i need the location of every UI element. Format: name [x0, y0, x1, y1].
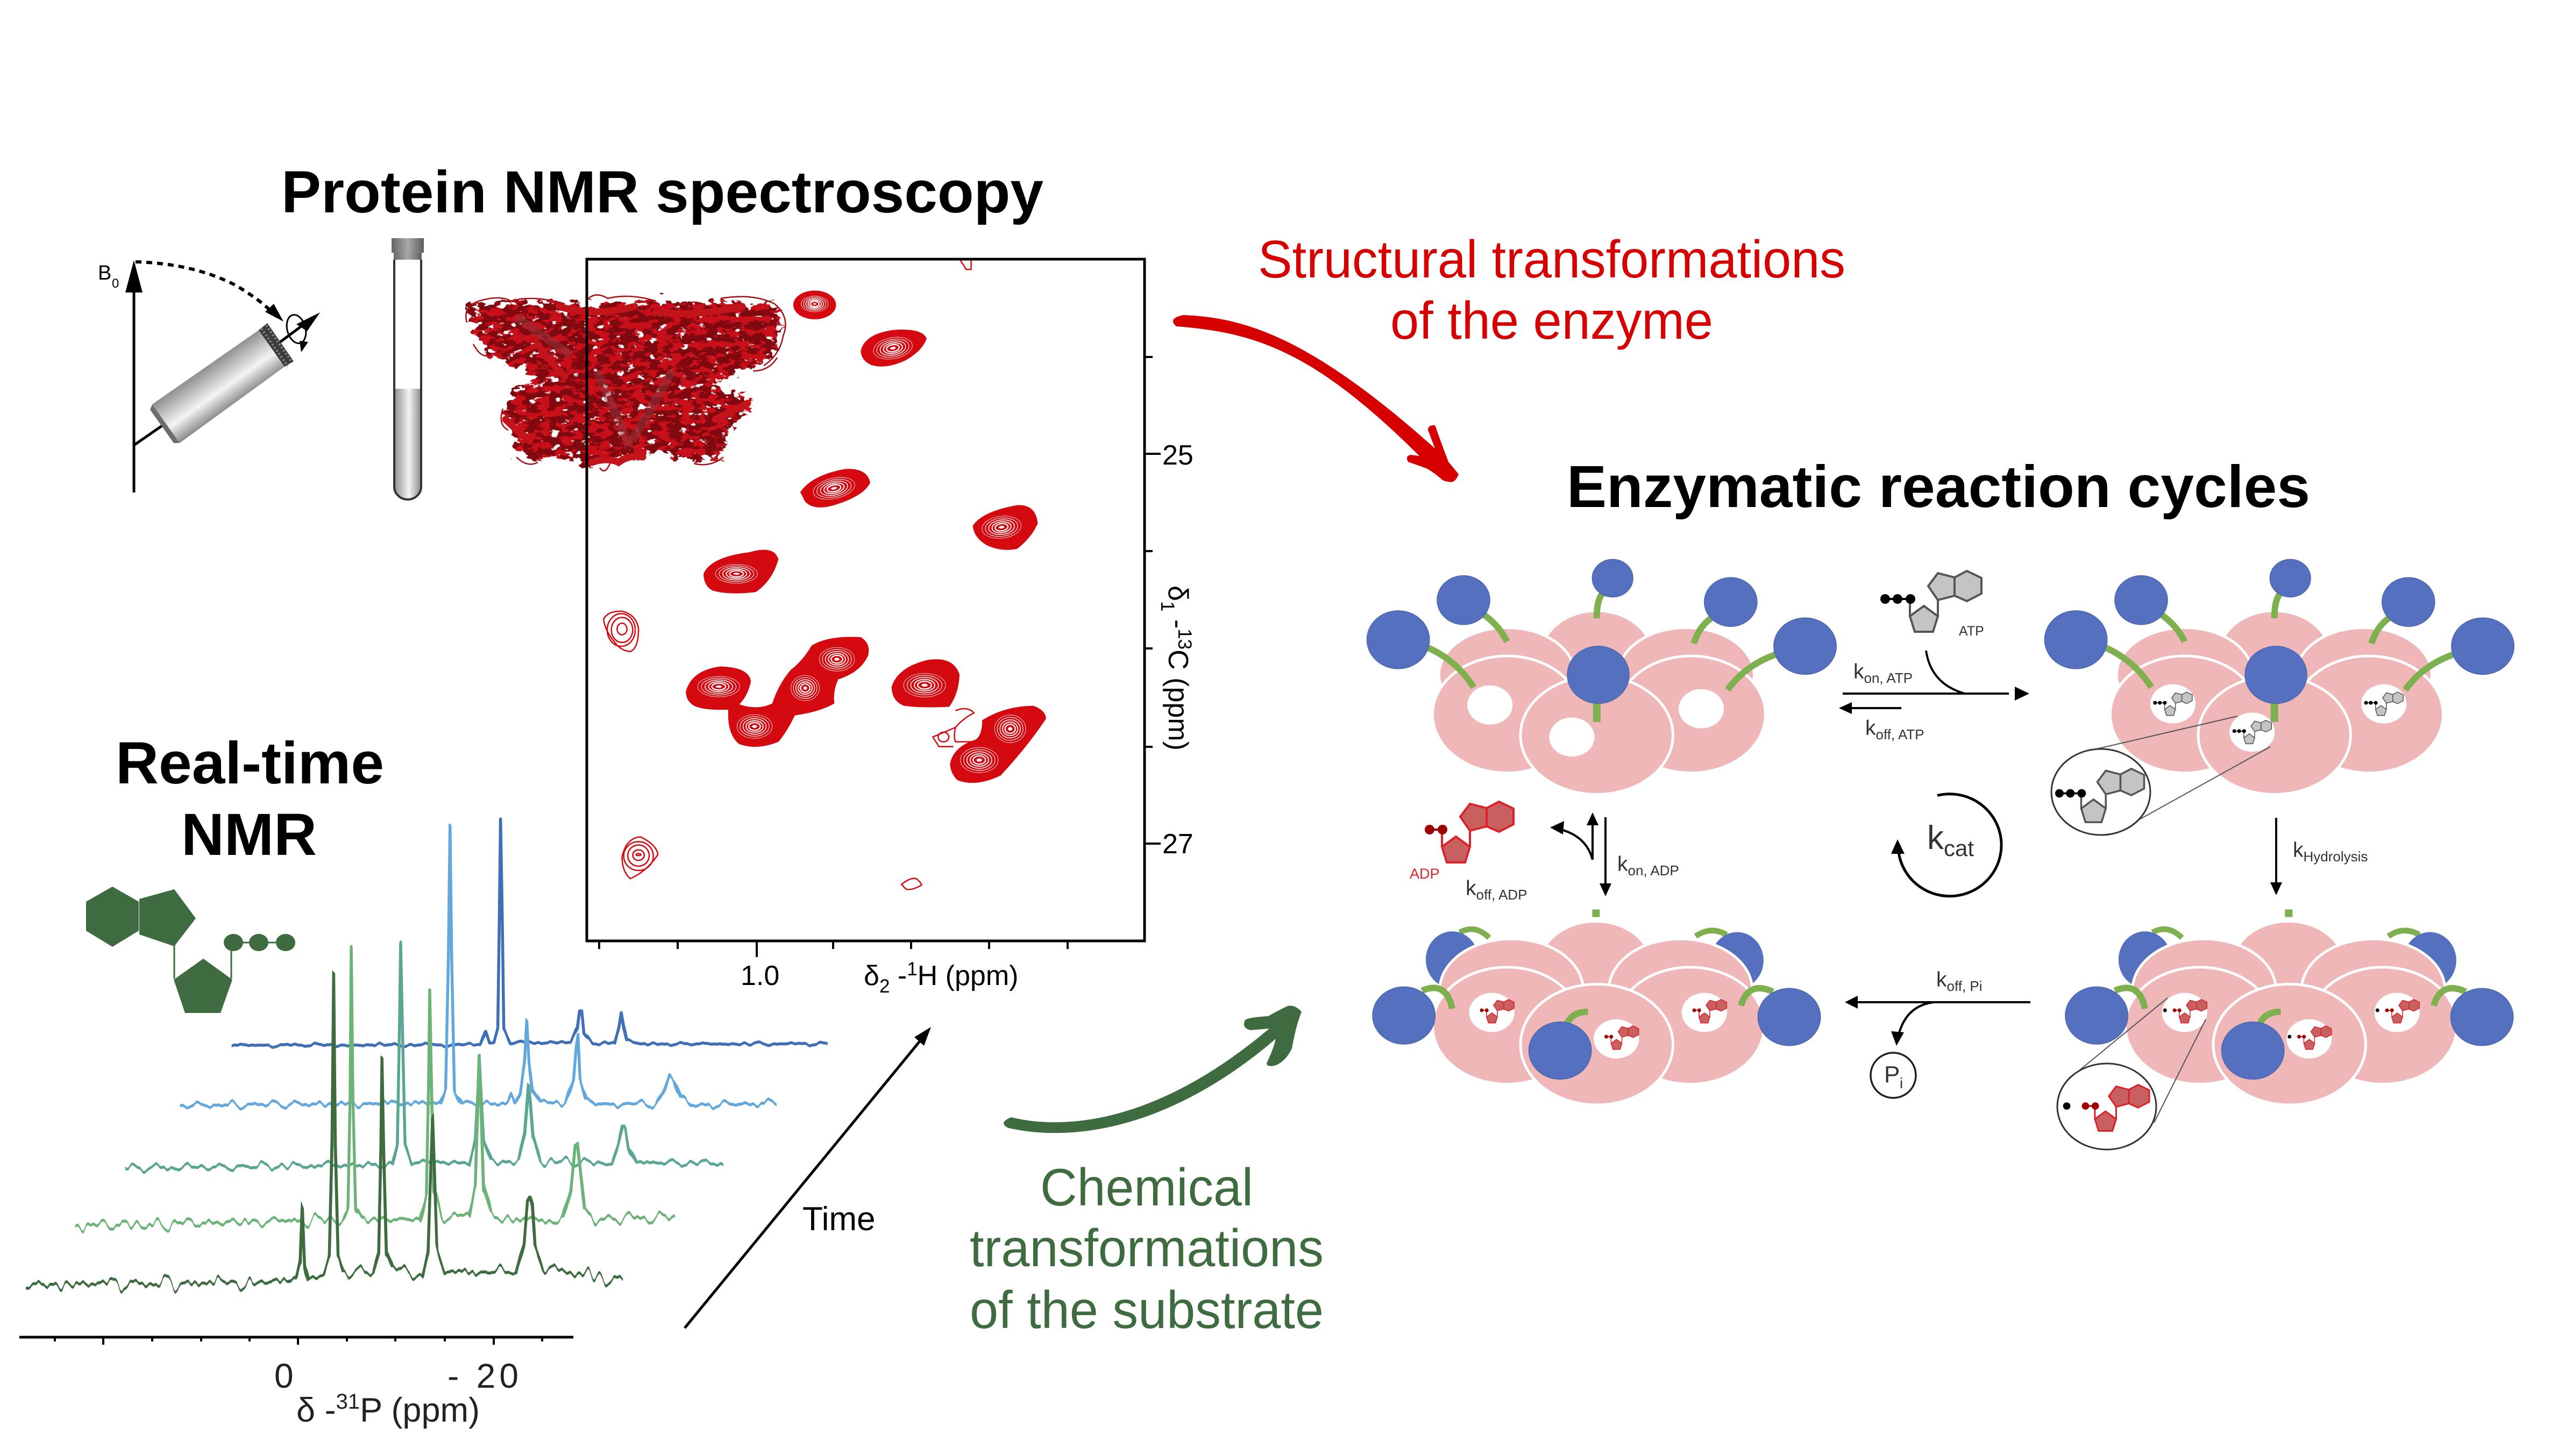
arrow: hydrolysis: Hydrolysis: [2303, 848, 2368, 865]
arrow: green, real-time NMR to enzyme cycle: [1004, 1005, 1302, 1133]
icon: free ATP with binding arrows: on, ATP: [1864, 670, 1913, 686]
x axis label: δ: [864, 960, 879, 991]
arrows: ADP binding and release: k: [1617, 853, 1628, 876]
enzyme: ATP-bound open state: [2044, 559, 2514, 835]
arrows: ADP binding and release: [1466, 812, 1679, 903]
trace 2: [180, 826, 777, 1105]
title: Real-time NMR: [116, 730, 384, 868]
arrow: phosphate release: k: [1936, 968, 1947, 991]
arrow: phosphate release: off, Pi: [1947, 978, 1983, 994]
icon: free ATP with binding arrows: k: [1865, 717, 1876, 740]
enzyme: apo open state: [1367, 559, 1836, 795]
axis: 31P chemical shift: [19, 1337, 573, 1429]
phosphate circle: i: [1900, 1075, 1903, 1091]
y axis label: C (ppm): [1162, 650, 1193, 751]
icon: rotor in magnetic field B0: B: [98, 262, 111, 284]
phosphate circle: [1871, 1053, 1916, 1098]
text: structural transformations: [1258, 230, 1845, 350]
inset: ADP and Pi magnified: [2057, 998, 2206, 1150]
text: chemical transformations: transformations: [970, 1218, 1324, 1277]
trace 5: [26, 973, 623, 1284]
icon: rotor in magnetic field B0: [98, 260, 320, 493]
phosphate circle: P: [1884, 1061, 1900, 1088]
arrows: ADP binding and release: on, ADP: [1628, 862, 1679, 879]
axis: 31P chemical shift: P (ppm): [360, 1391, 480, 1429]
enzyme: ADP-bound closed state: [1373, 910, 1821, 1105]
axis: 31P chemical shift: 31: [336, 1390, 360, 1414]
icon: free ATP with binding arrows: ATP: [1959, 624, 1984, 639]
y axis label: 13: [1174, 629, 1195, 650]
title: Enzymatic reaction cycles: Enzymatic reaction cycles: [1567, 454, 2310, 520]
x axis label: H (ppm): [918, 960, 1018, 991]
spectrum contour peaks: [603, 260, 1046, 889]
trace 4: [75, 951, 675, 1226]
arrow: time axis: [685, 1027, 931, 1328]
icon: free ATP with binding arrows: off, ATP: [1876, 726, 1924, 743]
enzyme: ADP + Pi closed state: [2057, 910, 2513, 1150]
x axis label: 1: [907, 959, 918, 980]
trace 3: [125, 945, 723, 1168]
icon: kcat cycle arrow: cat: [1944, 836, 1974, 861]
arrow: hydrolysis: [2270, 818, 2368, 895]
axis: 31P chemical shift: δ -: [296, 1391, 336, 1429]
chart: 2D NMR spectrum: [587, 259, 1195, 997]
arrow: red, spectrum to enzyme cycle: [1173, 315, 1459, 482]
text: chemical transformations: of the substrate: [970, 1280, 1324, 1339]
arrow: hydrolysis: k: [2293, 839, 2304, 862]
trace 1: [232, 819, 828, 1045]
title: Real-time NMR: Real-time: [116, 730, 384, 796]
icon: green substrate molecule: [86, 887, 295, 1013]
plot frame with axes: [587, 259, 1161, 957]
axis: 31P chemical shift: 0: [274, 1357, 294, 1395]
arrow: time axis: Time: [802, 1201, 875, 1238]
tick labels: 25: [1162, 440, 1193, 471]
y axis label: δ: [1162, 586, 1193, 601]
tick labels: 27: [1162, 829, 1193, 860]
axis: 31P chemical shift: - 20: [447, 1357, 518, 1395]
arrows: ADP binding and release: off, ADP: [1476, 887, 1527, 903]
icon: NMR tube: [392, 238, 424, 499]
y axis label: -: [1162, 611, 1193, 629]
icon: kcat cycle arrow: [1891, 794, 2001, 896]
arrows: ADP binding and release: k: [1466, 877, 1476, 900]
icon: free ADP molecule: [1410, 802, 1514, 882]
icon: free ATP with binding arrows: k: [1853, 660, 1864, 683]
illustration: protein ribbon structure: [466, 295, 785, 471]
text: structural transformations: of the enzyme: [1390, 291, 1713, 350]
text: chemical transformations: Chemical: [1040, 1158, 1253, 1217]
x axis label: -: [890, 960, 907, 991]
icon: free ATP with binding arrows: [1839, 571, 2029, 743]
title: Real-time NMR: NMR: [181, 802, 317, 868]
icon: free ADP molecule: ADP: [1410, 866, 1440, 882]
text: structural transformations: Structural transformations: [1258, 230, 1845, 289]
icon: rotor in magnetic field B0: 0: [112, 276, 119, 291]
x axis label: 2: [879, 976, 890, 997]
tick labels: 1.0: [741, 960, 779, 991]
y axis label: 1: [1157, 601, 1178, 611]
inset: bound ATP magnified: [2051, 716, 2270, 835]
tick labels: [741, 440, 1193, 991]
arrow: phosphate release: [1845, 968, 2030, 1098]
text: chemical transformations: [970, 1158, 1324, 1339]
chart: stacked 1D phosphorus NMR spectra: [26, 819, 828, 1284]
icon: kcat cycle arrow: k: [1927, 819, 1944, 857]
title: Protein NMR spectroscopy: Protein NMR spectroscopy: [281, 159, 1043, 225]
